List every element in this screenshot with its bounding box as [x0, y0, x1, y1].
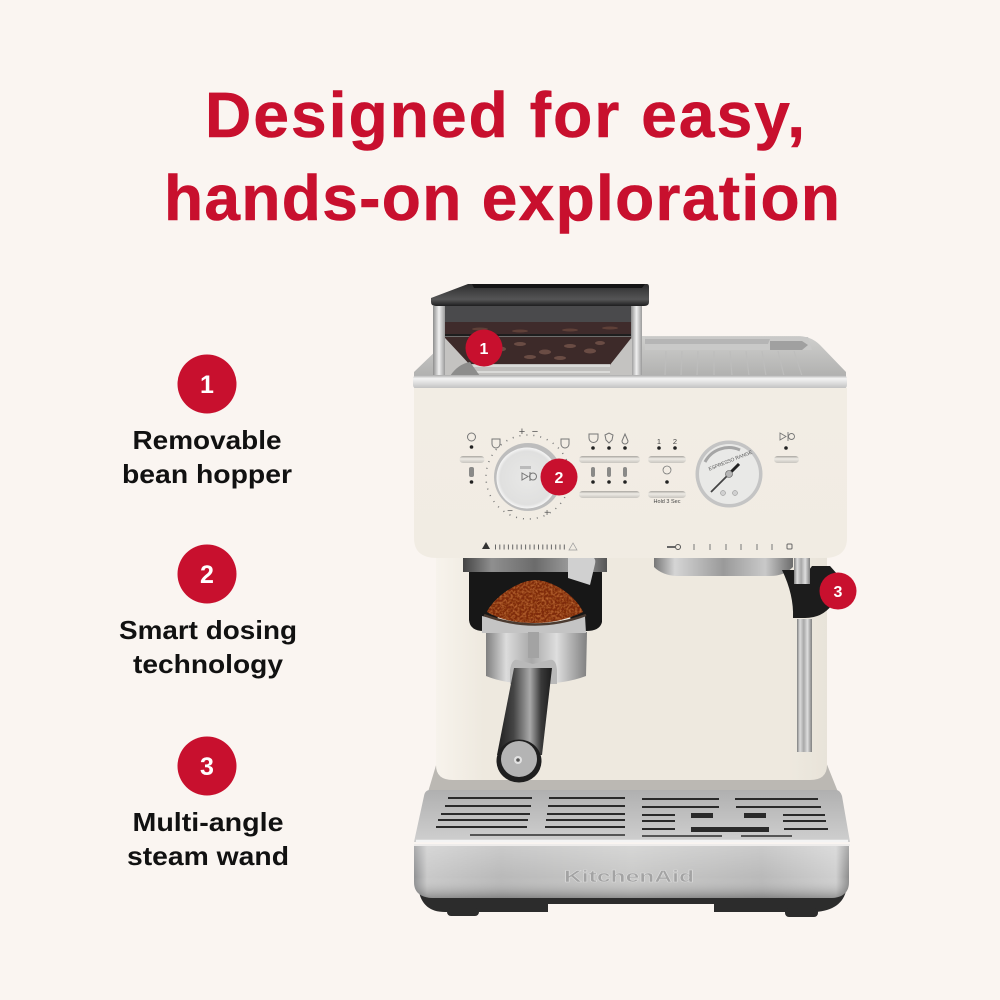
- control: steam button: [774, 432, 799, 463]
- control: shot buttons: [648, 437, 686, 505]
- control: power button: [460, 433, 484, 484]
- control: shot buttons: Hold 3 Sec: [654, 499, 681, 505]
- base and feet: [418, 885, 847, 917]
- title: [164, 79, 840, 234]
- marker 2: 2: [555, 470, 564, 487]
- brand name: KitchenAid: [564, 867, 694, 886]
- control: dose dial: −: [532, 426, 538, 438]
- feature 1: removable bean hopper: 1: [200, 371, 214, 399]
- top plate: [414, 336, 846, 380]
- feature 1: removable bean hopper: [122, 354, 292, 489]
- drip tray: [414, 790, 850, 845]
- feature 2: smart dosing technology: Smart dosing: [119, 615, 297, 645]
- title: hands-on exploration: [164, 162, 840, 234]
- control: shot buttons: 2: [673, 437, 677, 446]
- control: shot buttons: 1: [657, 437, 661, 446]
- espresso machine: [413, 284, 856, 917]
- group heads: [463, 558, 793, 576]
- feature 2: smart dosing technology: 2: [200, 561, 214, 589]
- marker 3: 3: [834, 584, 843, 601]
- control: dose dial: −: [507, 506, 513, 517]
- marker 1: 1: [480, 341, 489, 358]
- title: Designed for easy,: [205, 79, 805, 151]
- feature 1: removable bean hopper: Removable: [132, 425, 282, 455]
- marker 1: [466, 330, 502, 366]
- hopper lid: [431, 284, 649, 306]
- steam dial scale: [667, 544, 792, 550]
- portafilter and dosing cradle: [469, 558, 602, 684]
- feature 3: multi-angle steam wand: 3: [200, 753, 214, 781]
- control: dose dial: +: [519, 426, 525, 438]
- front control panel: [414, 388, 847, 558]
- machine lower body: [436, 550, 827, 780]
- pressure gauge: [696, 440, 762, 508]
- pressure gauge: ESPRESSO RANGE: [708, 449, 754, 473]
- marker 2: [540, 458, 578, 496]
- handle end cap: [496, 740, 542, 782]
- feature 2: smart dosing technology: technology: [133, 649, 284, 679]
- portafilter handle: [497, 668, 552, 755]
- feature 3: multi-angle steam wand: steam wand: [127, 841, 289, 871]
- feature 3: multi-angle steam wand: [127, 736, 289, 871]
- bean hopper: [431, 284, 649, 376]
- marker 3: [820, 572, 856, 610]
- tray front panel: [414, 846, 849, 898]
- control: brew buttons: [579, 433, 640, 498]
- feature 2: smart dosing technology: [119, 544, 297, 679]
- control: dose dial: [486, 426, 570, 519]
- chrome trim: [413, 375, 847, 389]
- control: dose dial: +: [544, 508, 550, 519]
- drip tray back band: [428, 762, 838, 792]
- feature 3: multi-angle steam wand: Multi-angle: [132, 807, 284, 837]
- steam wand: [782, 558, 838, 752]
- feature 1: removable bean hopper: bean hopper: [122, 459, 292, 489]
- grind scale: [482, 542, 577, 550]
